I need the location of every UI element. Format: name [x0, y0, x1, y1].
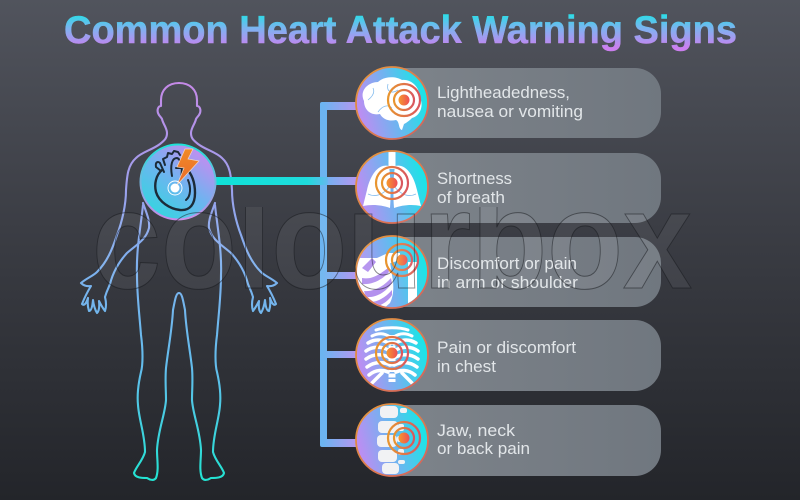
panel: arm or shoulder — [356, 236, 661, 312]
text: chest: Pain or discomfort — [437, 338, 576, 357]
text: arm or shoulder: in arm or shoulder — [437, 273, 578, 292]
text: jaw neck back: or back pain — [437, 439, 530, 458]
watermark: colourbox — [92, 161, 692, 318]
icon: spine target — [356, 404, 428, 476]
text: shortness of breath: of breath — [437, 188, 505, 207]
connector tree — [320, 102, 363, 447]
text: arm or shoulder: Discomfort or pain — [437, 254, 577, 273]
text: shortness of breath: Shortness — [437, 169, 512, 188]
text: jaw neck back: Jaw, neck — [437, 421, 516, 440]
text: chest: in chest — [437, 357, 496, 376]
text: lightheadedness: nausea or vomiting — [437, 102, 583, 121]
panel: jaw neck back — [356, 404, 661, 476]
title: Common Heart Attack Warning Signs — [64, 9, 737, 52]
main connector from heart — [214, 177, 328, 185]
human body outline — [81, 83, 277, 480]
panel: chest — [356, 319, 661, 391]
icon: brain target — [356, 67, 428, 139]
icon: lungs target — [356, 151, 428, 223]
icon: heart attack badge — [140, 144, 216, 220]
panel: shortness of breath — [356, 151, 661, 223]
text: lightheadedness: Lightheadedness, — [437, 83, 570, 102]
panel: lightheadedness — [356, 67, 661, 139]
icon: arm and shoulder target — [356, 236, 428, 312]
icon: ribcage target — [356, 319, 428, 391]
